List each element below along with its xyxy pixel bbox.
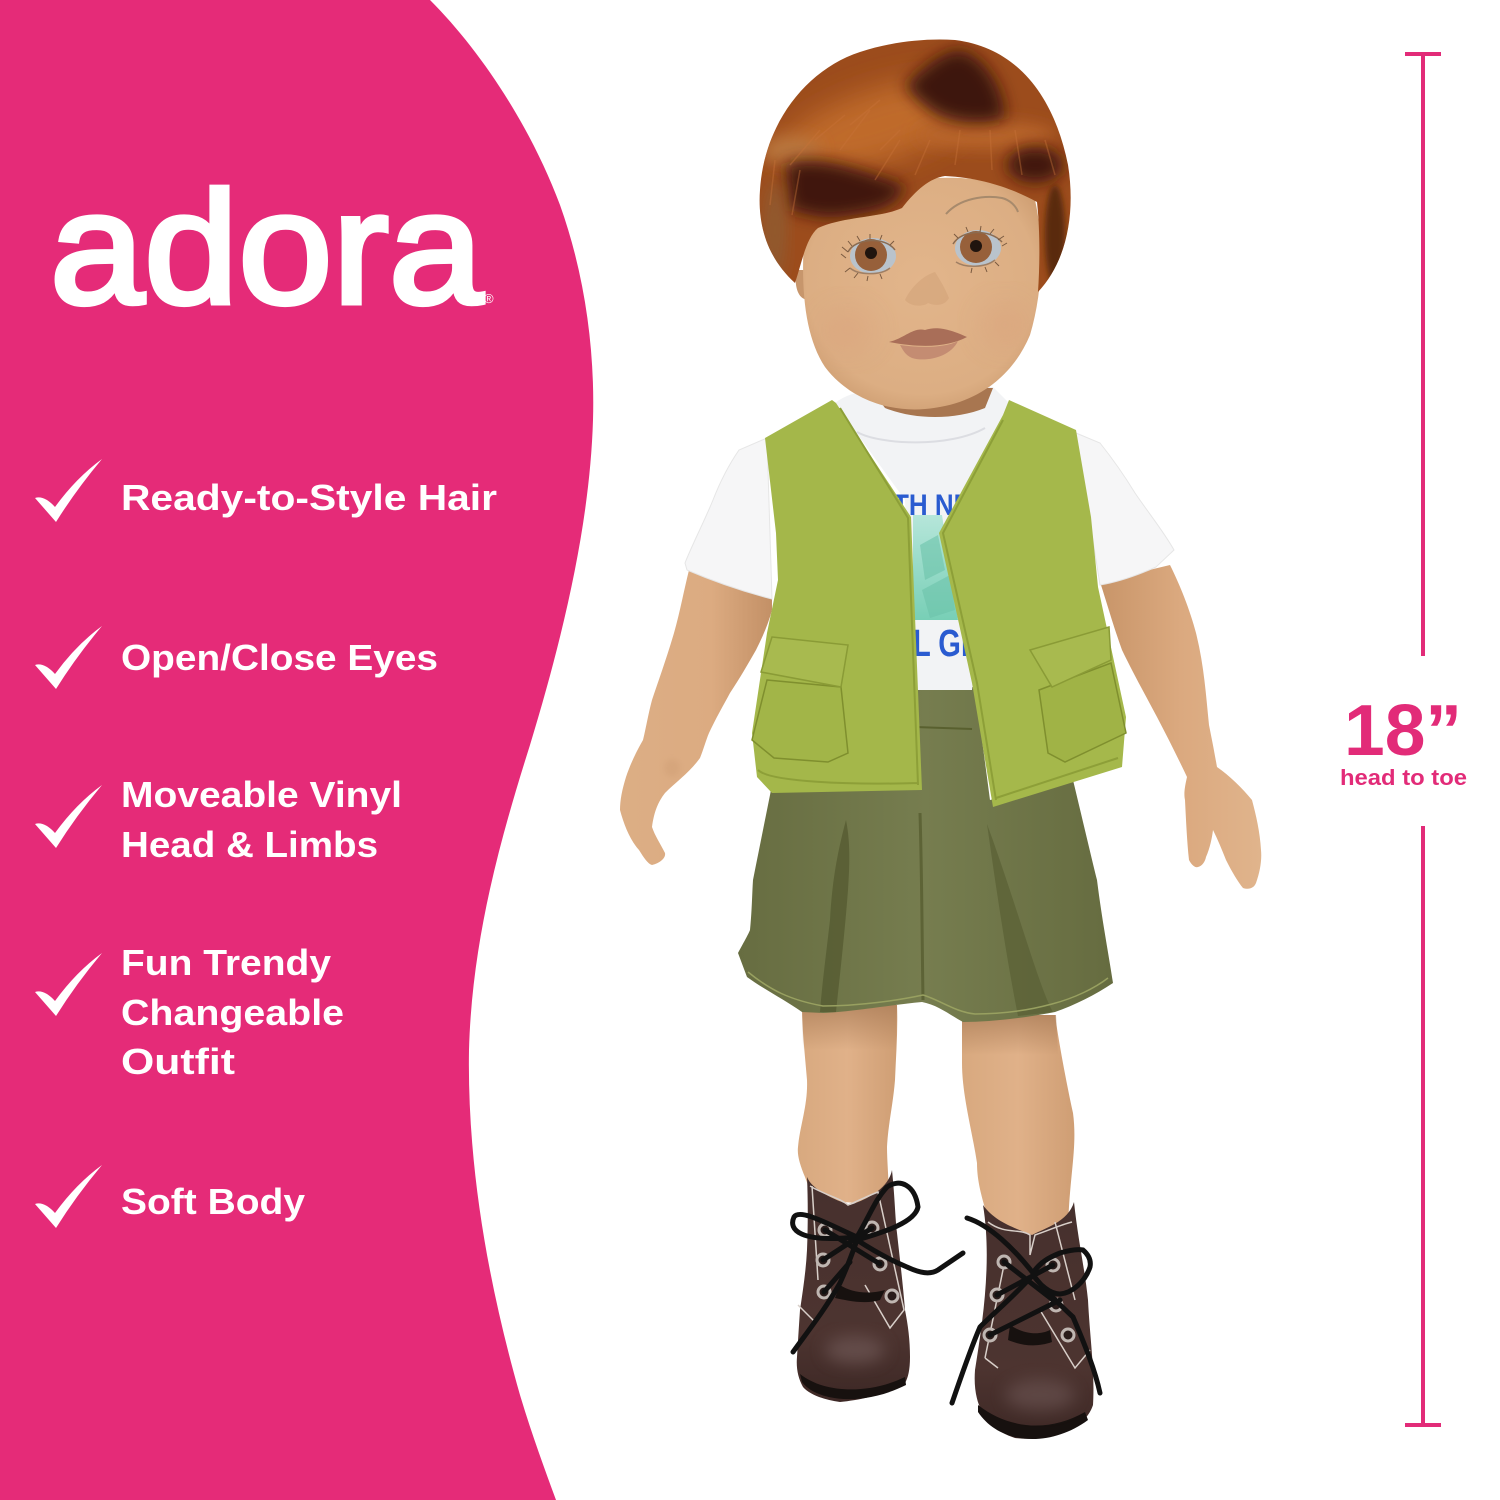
doll head: [760, 40, 1071, 409]
cheeks: [822, 303, 1029, 352]
hair strands: [770, 130, 1056, 215]
logo: adora: ®: [484, 291, 494, 306]
face: [803, 178, 1041, 409]
logo: adora: adora: [50, 158, 483, 337]
ears: [796, 270, 1043, 299]
feature: Fun Trendy Changeable Outfit: Outfit: [121, 1041, 235, 1082]
neck: [870, 388, 993, 417]
shirt body: [835, 387, 1008, 690]
left pocket: [752, 637, 848, 762]
globe print: [913, 515, 958, 620]
right sleeve: [1076, 433, 1174, 585]
eyebrow: [946, 197, 1018, 214]
collar seam: [857, 428, 985, 442]
feature: Ready-to-Style Hair: Ready-to-Style Hair: [121, 477, 497, 518]
doll right arm: [1100, 565, 1261, 889]
lips: [889, 328, 967, 359]
vest seams: [758, 408, 1118, 800]
feature: Open/Close Eyes: Open/Close Eyes: [121, 637, 438, 678]
feature: Open/Close Eyes: [35, 626, 438, 689]
height ruler: 18 inches head to toe: head to toe: [1340, 765, 1467, 790]
feature: Soft Body: [35, 1165, 305, 1228]
shirt print text: L Gi: [913, 623, 969, 665]
t-shirt: [685, 387, 1174, 690]
feature: Moveable Vinyl Head & Limbs: Head & Limbs: [121, 824, 378, 865]
height ruler: 18 inches head to toe: [1340, 54, 1467, 1425]
skirt: [738, 687, 1113, 1022]
left boot: [793, 1170, 963, 1402]
right pocket: [1030, 627, 1126, 762]
feature: Fun Trendy Changeable Outfit: Changeable: [121, 992, 344, 1033]
pink side panel: [0, 0, 593, 1500]
right boot laces: [952, 1218, 1100, 1403]
right eye: [953, 226, 1007, 273]
feature: Moveable Vinyl Head & Limbs: [35, 774, 402, 865]
shirt print text: TH NE: [893, 489, 971, 522]
shirt print text: [896, 494, 966, 656]
right boot: [952, 1202, 1100, 1439]
feature: Ready-to-Style Hair: [35, 459, 497, 522]
doll left leg: [798, 1005, 897, 1205]
vest left panel: [752, 400, 922, 793]
feature: Moveable Vinyl Head & Limbs: Moveable Vinyl: [121, 774, 402, 815]
feature: Soft Body: Soft Body: [121, 1181, 305, 1222]
height ruler: 18 inches head to toe: 18”: [1344, 691, 1462, 771]
feature: Fun Trendy Changeable Outfit: Fun Trendy: [121, 942, 331, 983]
vest right panel: [939, 400, 1126, 807]
doll right leg: [962, 1015, 1074, 1240]
doll left arm: [620, 570, 772, 865]
feature: Fun Trendy Changeable Outfit: [35, 942, 344, 1082]
hair: [760, 40, 1071, 292]
doll: [620, 40, 1261, 1439]
left sleeve: [685, 438, 772, 599]
left eye: [841, 234, 896, 281]
left boot laces: [793, 1183, 963, 1352]
nose: [905, 272, 949, 306]
